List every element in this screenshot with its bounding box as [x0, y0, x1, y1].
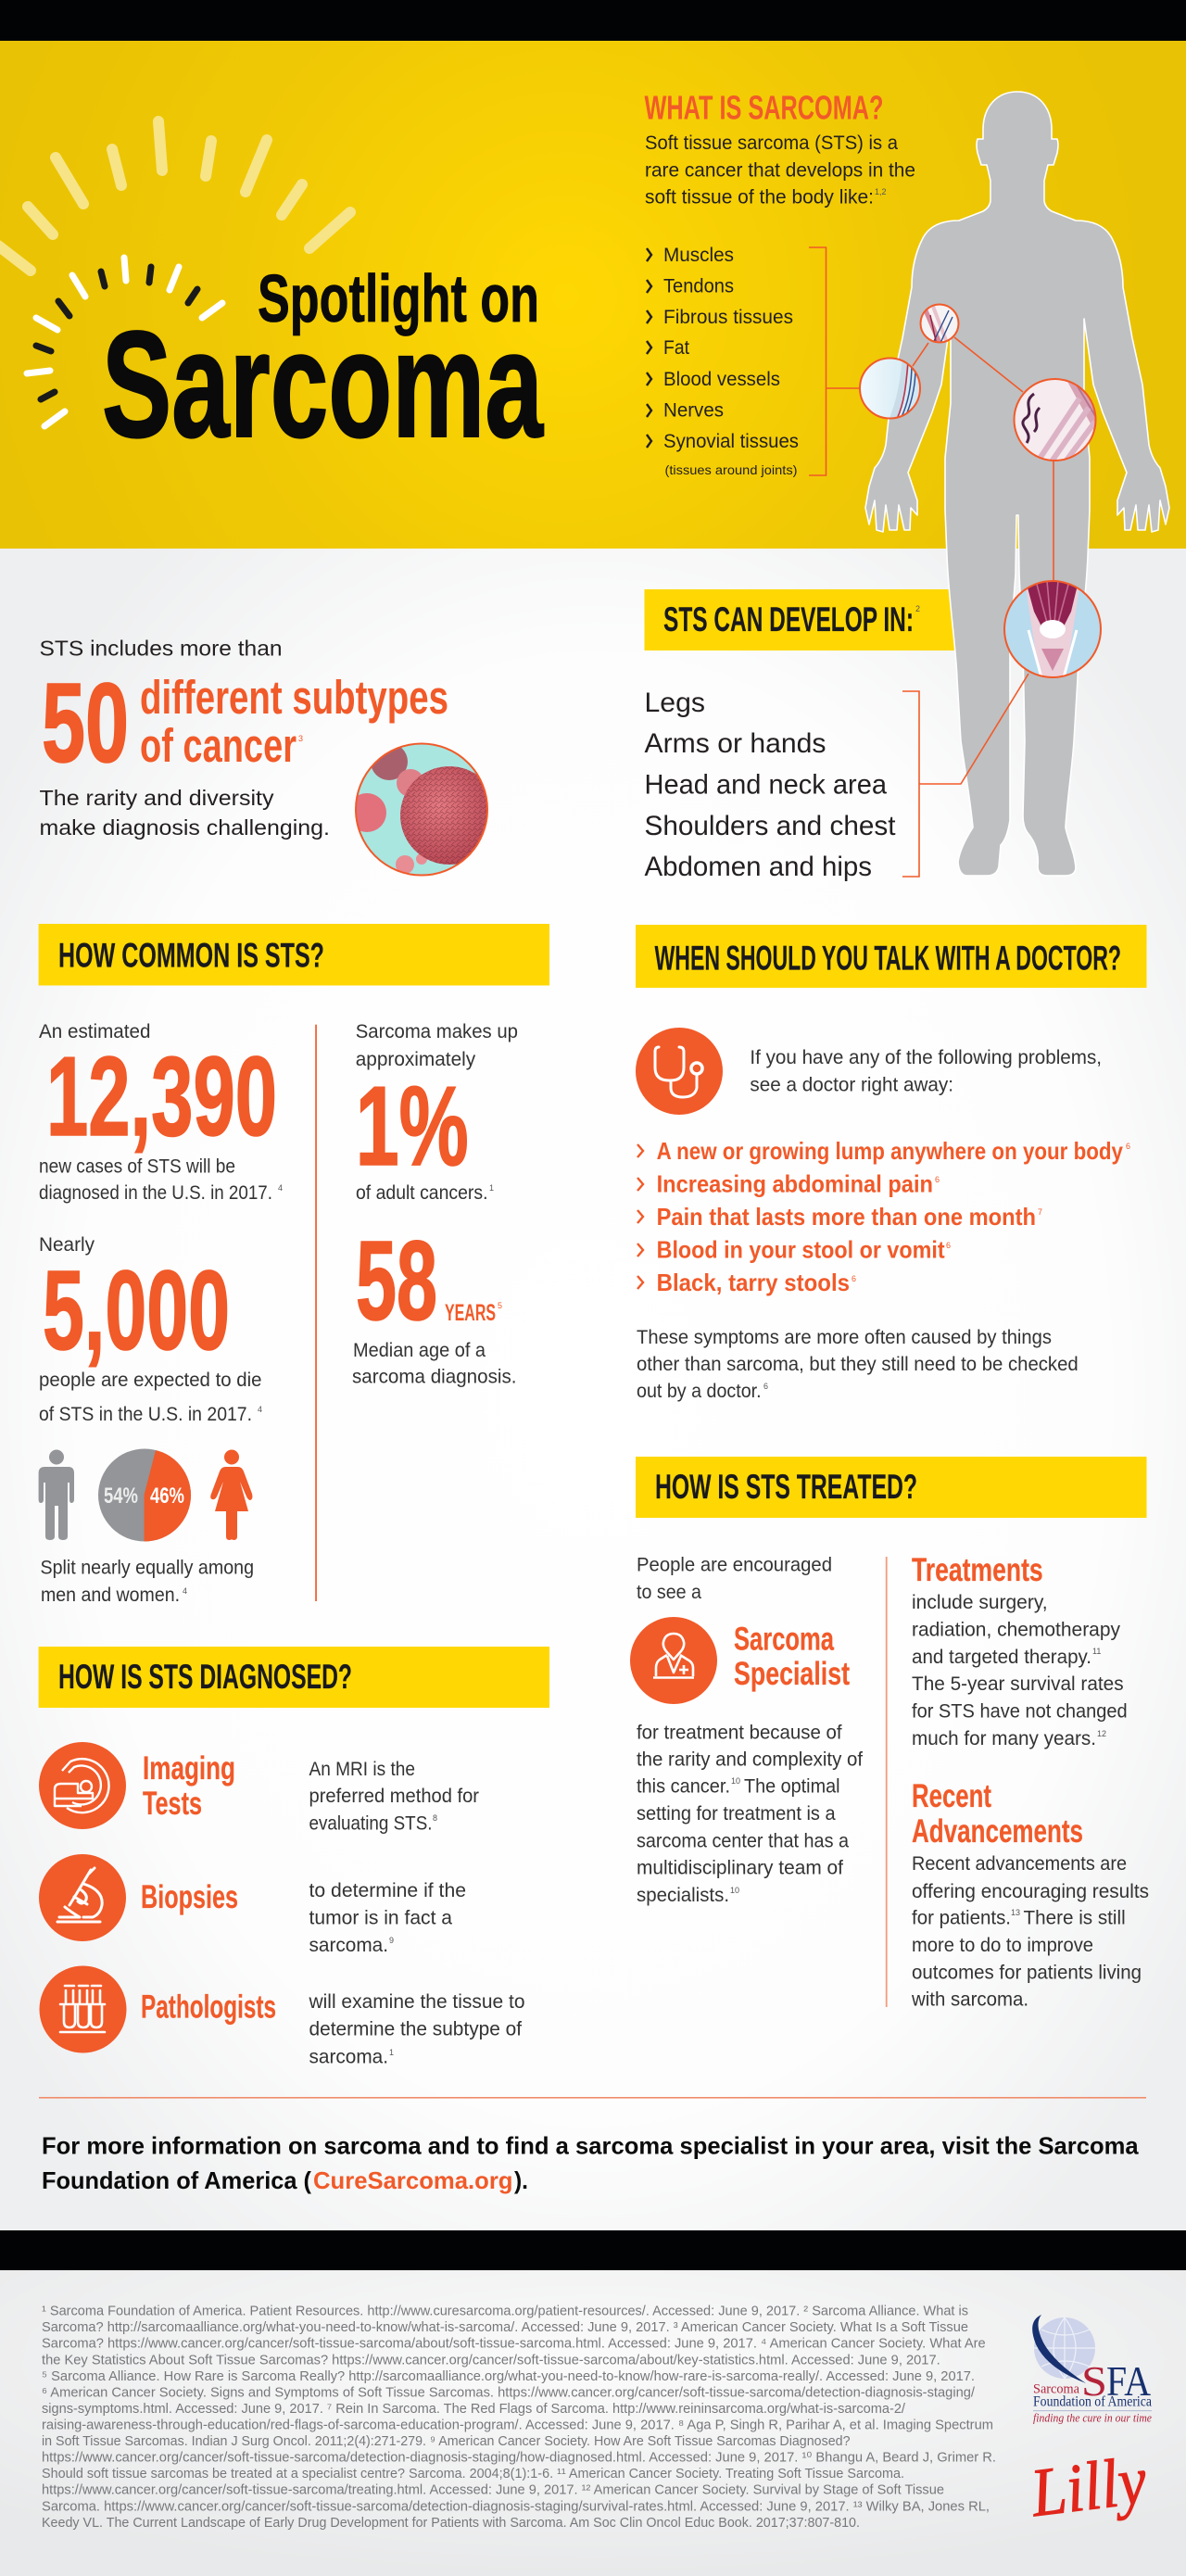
panel: STS can develop in heading bar — [645, 589, 964, 650]
divider — [39, 2097, 1146, 2099]
text: MRI description: An MRI is the — [309, 1759, 415, 1780]
footnotes: raising-awareness-through-education/red-flags-of-sarcoma-education-program/. Accessed: June 9, 2017. ⁸ Aga P, Singh R, Parihar A, et al. Imaging Spectrum — [42, 2418, 993, 2433]
text: recent advancements — [911, 1778, 1149, 2011]
body silhouette — [865, 92, 1169, 876]
stat: 5,000 deaths — [39, 1234, 262, 1425]
panel: STS can develop in heading bar: STS CAN DEVELOP IN: — [663, 600, 914, 638]
list: warning symptoms: Blood in your stool or vomit — [657, 1236, 945, 1264]
text: recent advancements: Recent — [912, 1778, 991, 1814]
list: body areas: Legs — [645, 688, 705, 718]
text: recent advancements: offering encouraging results — [912, 1881, 1149, 1902]
footnotes: https://www.cancer.org/cancer/soft-tissue-sarcoma/detection-diagnosis-staging/how-diagnosed.html. Accessed: June 9, 2017. ¹⁰ Bhangu A, Beard J, Grimer R. — [42, 2451, 996, 2466]
stat: 5,000 deaths: people are expected to die — [39, 1370, 261, 1391]
text: biopsy description: tumor is in fact a — [309, 1908, 452, 1929]
stat: 1 percent of adult cancers: approximately — [356, 1049, 476, 1070]
text: definition of soft tissue sarcoma — [645, 133, 915, 208]
list: warning symptoms: 6 — [1126, 1142, 1130, 1151]
icon: sarcoma specialist doctor — [630, 1617, 717, 1704]
text: symptoms note: other than sarcoma, but they still need to be checked — [637, 1354, 1079, 1375]
list: soft tissue types: Nerves — [663, 400, 724, 421]
text: specialist explanation: sarcoma center that has a — [637, 1831, 849, 1851]
text: pathologist description: sarcoma. — [309, 2047, 388, 2068]
text: treatments: include surgery, — [912, 1592, 1048, 1613]
title — [102, 262, 544, 469]
stat: 12,390 new cases: diagnosed in the U.S. in 2017. — [39, 1182, 272, 1204]
text: treatments: radiation, chemotherapy — [912, 1620, 1120, 1641]
list: warning symptoms: Increasing abdominal pain — [657, 1169, 933, 1197]
stat: 1 percent of adult cancers — [356, 1021, 518, 1204]
stat: median age 58 years: 5 — [498, 1301, 502, 1310]
list: body areas: Arms or hands — [645, 728, 826, 759]
stat: 1 percent of adult cancers: 1% — [356, 1063, 469, 1189]
list: soft tissue types: Tendons — [663, 276, 734, 297]
page background — [0, 549, 1186, 2230]
panel: STS can develop in heading bar: 2 — [915, 604, 920, 613]
list: soft tissue types — [647, 245, 799, 477]
label: pathologists: Pathologists — [141, 1989, 276, 2026]
text: specialist explanation — [637, 1723, 863, 1906]
footnotes: Keedy VL. The Current Landscape of Early Drug Development for Patients with Sarcoma. Am Soc Clin Oncol Educ Book. 2017;37:807-810. — [42, 2516, 860, 2531]
text: people are encouraged: People are encouraged — [637, 1555, 832, 1575]
heading: how is STS diagnosed: HOW IS STS DIAGNOSED? — [58, 1658, 352, 1696]
text: specialist explanation: multidisciplinary team of — [637, 1857, 843, 1879]
list: warning symptoms: 6 — [946, 1241, 951, 1250]
stat: median age 58 years — [352, 1218, 517, 1388]
text: treatments: 12 — [1097, 1729, 1106, 1738]
text: 50 different subtypes callout: 50 — [42, 660, 129, 786]
text: specialist explanation: setting for treatment is a — [637, 1803, 836, 1825]
heading: sarcoma specialist: Specialist — [734, 1656, 850, 1692]
list: soft tissue types: Blood vessels — [663, 369, 780, 390]
stat: 12,390 new cases: new cases of STS will be — [39, 1156, 235, 1178]
heading: sarcoma specialist: Sarcoma — [734, 1621, 834, 1657]
text: MRI description — [309, 1759, 479, 1835]
footnotes: Should soft tissue sarcomas be treated at a specialist centre? Sarcoma. 2004;8(1):1-6. ¹¹ American Cancer Society. Treating Soft Tissue Sarcoma. — [42, 2467, 904, 2481]
icon: cancer cell circle — [355, 743, 488, 877]
text: 50 different subtypes callout — [39, 637, 448, 840]
call to action: For more information on sarcoma and to find a sarcoma specialist in your area, visit the Sarcoma — [42, 2131, 1139, 2159]
icon: microscope — [39, 1854, 126, 1941]
text: split nearly equally: 4 — [183, 1586, 187, 1596]
list: warning symptoms: 6 — [852, 1274, 856, 1283]
heading: how is STS treated: HOW IS STS TREATED? — [655, 1468, 917, 1506]
heading: how common is STS: HOW COMMON IS STS? — [58, 937, 324, 975]
text: doctor intro: If you have any of the following problems, — [750, 1047, 1102, 1068]
yellow header panel — [0, 41, 1186, 549]
text: recent advancements: with sarcoma. — [911, 1989, 1028, 2011]
footnotes: signs-symptoms.html. Accessed: June 9, 2017. ⁷ Rein In Sarcoma. The Red Flags of Sarcoma. http://www.reininsarcoma.org/what-is-sarcoma-2/ — [42, 2402, 906, 2417]
heading: sarcoma specialist — [734, 1621, 850, 1692]
text: treatments: and targeted therapy. — [912, 1647, 1091, 1668]
list: soft tissue types: (tissues around joints) — [665, 462, 797, 477]
bottom black band — [0, 2230, 1186, 2270]
text: pathologist description: 1 — [389, 2048, 394, 2057]
call to action: ). — [514, 2166, 528, 2194]
icon: large muscle circle — [1014, 378, 1099, 461]
text: definition of soft tissue sarcoma: soft tissue of the body like: — [645, 187, 874, 208]
chart: sex split pie: 54% — [104, 1484, 138, 1509]
text: 50 different subtypes callout: The rarity and diversity — [39, 786, 274, 810]
footnotes: https://www.cancer.org/cancer/soft-tissue-sarcoma/treating.html. Accessed: June 9, 2017. ¹² American Cancer Society. Survival by Stage of Soft Tissue — [42, 2483, 944, 2498]
bracket connector: body areas — [902, 674, 1028, 877]
stat: median age 58 years: YEARS — [445, 1300, 496, 1326]
label: imaging tests: Imaging — [143, 1750, 235, 1787]
stat: median age 58 years: sarcoma diagnosis. — [352, 1366, 517, 1388]
text: recent advancements: 13 — [1011, 1908, 1020, 1917]
text: recent advancements: Recent advancements are — [912, 1853, 1127, 1875]
icon: medium blood vessel circle — [860, 358, 921, 419]
stat: 5,000 deaths: Nearly — [39, 1234, 95, 1256]
chart: sex split pie: 46% — [150, 1484, 184, 1509]
text: biopsy description: sarcoma. — [309, 1935, 388, 1956]
stat: 12,390 new cases: An estimated — [39, 1021, 150, 1042]
text: 50 different subtypes callout: of cancer — [140, 719, 296, 772]
text: symptoms note: 6 — [763, 1382, 768, 1391]
stat: 5,000 deaths: 5,000 — [43, 1247, 230, 1373]
footnotes: ⁶ American Cancer Society. Signs and Symptoms of Soft Tissue Sarcomas. https://www.cancer.org/cancer/soft-tissue-sarcoma/detection-diagnosis-staging/ — [42, 2385, 976, 2400]
text: people are encouraged: to see a — [637, 1582, 701, 1603]
text: pathologist description: will examine the tissue to — [309, 1991, 524, 2013]
footnotes: in Soft Tissue Sarcomas. Indian J Surg Oncol. 2011;2(4):271-279. ⁹ American Cancer Society. How Are Soft Tissue Sarcomas Diagnosed? — [42, 2434, 851, 2449]
text: people are encouraged — [637, 1555, 832, 1603]
stat: 5,000 deaths: of STS in the U.S. in 2017. — [39, 1404, 252, 1425]
text: MRI description: preferred method for — [309, 1786, 479, 1807]
text: 50 different subtypes callout: 3 — [298, 734, 303, 743]
icon: black and white sun rays — [27, 258, 222, 426]
footer background — [0, 2270, 1186, 2576]
text: definition of soft tissue sarcoma: rare cancer that develops in the — [645, 159, 915, 182]
text: recent advancements: There is still — [1023, 1908, 1126, 1929]
title: Sarcoma — [102, 299, 544, 469]
text: treatments: 11 — [1092, 1647, 1101, 1656]
icon: test tubes — [39, 1966, 126, 2053]
stat: 1 percent of adult cancers: of adult cancers. — [356, 1182, 487, 1204]
text: specialist explanation: for treatment because of — [637, 1723, 842, 1744]
text: MRI description: evaluating STS. — [309, 1813, 432, 1835]
stat: 12,390 new cases: 4 — [278, 1183, 283, 1193]
icon: pale sun rays — [0, 121, 350, 271]
top black band — [0, 0, 1186, 41]
stat: 12,390 new cases: 12,390 — [46, 1033, 277, 1159]
logo: Lilly: Lilly — [1027, 2443, 1151, 2532]
heading: what is sarcoma: WHAT IS SARCOMA? — [645, 89, 884, 126]
text: pathologist description: determine the subtype of — [309, 2019, 522, 2040]
text: specialist explanation: this cancer. — [637, 1776, 730, 1798]
list: body areas: Head and neck area — [645, 770, 887, 801]
label: imaging tests: Tests — [143, 1786, 202, 1822]
text: recent advancements: Advancements — [912, 1813, 1083, 1850]
footnotes: Sarcoma? http://sarcomaalliance.org/what-you-need-to-know/what-is-sarcoma/. Accessed: June 9, 2017. ³ American Cancer Society. What Is a Soft Tissue — [42, 2320, 968, 2335]
text: treatments: Treatments — [912, 1552, 1043, 1588]
text: recent advancements: outcomes for patients living — [912, 1963, 1142, 1983]
footnotes: Sarcoma? https://www.cancer.org/cancer/soft-tissue-sarcoma/about/soft-tissue-sarcoma.html. Accessed: June 9, 2017. ⁴ American Cancer Society. What Are — [42, 2337, 986, 2352]
text: MRI description: 8 — [433, 1813, 437, 1823]
text: pathologist description — [309, 1991, 524, 2068]
stat: median age 58 years: 58 — [356, 1218, 437, 1344]
text: split nearly equally: men and women. — [41, 1585, 180, 1606]
list: body areas: Shoulders and chest — [645, 811, 896, 841]
text: recent advancements: more to do to improve — [912, 1935, 1093, 1956]
footnotes: Sarcoma. https://www.cancer.org/cancer/soft-tissue-sarcoma/detection-diagnosis-staging/survival-rates.html. Accessed: June 9, 2017. ¹³ Wilky BA, Jones RL, — [42, 2499, 990, 2514]
text: definition of soft tissue sarcoma: 1,2 — [875, 187, 887, 196]
text: specialist explanation: 10 — [730, 1886, 739, 1895]
label: biopsies: Biopsies — [141, 1879, 238, 1915]
list: soft tissue types: Muscles — [663, 245, 734, 266]
text: specialist explanation: the rarity and complexity of — [637, 1749, 863, 1771]
footnotes: ⁵ Sarcoma Alliance. How Rare is Sarcoma Really? http://sarcomaalliance.org/what-you-need-to-know/how-rare-is-sarcoma-really/. Accessed: June 9, 2017. — [42, 2369, 975, 2384]
icon: knee circle — [1004, 581, 1101, 677]
text: 50 different subtypes callout: make diagnosis challenging. — [39, 815, 330, 840]
list: warning symptoms: Pain that lasts more than one month — [657, 1203, 1036, 1231]
list: body areas — [645, 688, 896, 882]
text: doctor intro: see a doctor right away: — [750, 1075, 953, 1095]
text: biopsy description — [309, 1880, 466, 1956]
text: specialist explanation: 10 — [731, 1776, 740, 1786]
list: warning symptoms: 6 — [935, 1175, 940, 1184]
label: imaging tests — [143, 1750, 235, 1822]
call to action: Foundation of America ( — [42, 2166, 311, 2194]
icon: stethoscope — [636, 1028, 723, 1115]
icon: small tissue circle — [920, 304, 959, 343]
bracket connector: tissue list — [809, 247, 1054, 581]
stat: 1 percent of adult cancers: 1 — [489, 1183, 494, 1193]
footnotes — [42, 2305, 996, 2531]
list: body areas: Abdomen and hips — [645, 852, 872, 882]
text: biopsy description: 9 — [389, 1936, 394, 1945]
list: warning symptoms: 7 — [1038, 1207, 1042, 1217]
text: treatments: The 5-year survival rates — [912, 1673, 1124, 1695]
text: treatments: for STS have not changed — [912, 1701, 1128, 1722]
text: symptoms note: These symptoms are more often caused by things — [637, 1327, 1052, 1348]
call to action — [42, 2131, 1139, 2194]
text: definition of soft tissue sarcoma: Soft tissue sarcoma (STS) is a — [645, 133, 898, 154]
heading: how is STS treated — [636, 1457, 1147, 1518]
call to action: CureSarcoma.org — [313, 2166, 513, 2194]
logo: Sarcoma Foundation of America: Foundation of America — [1033, 2393, 1152, 2409]
stat: 1 percent of adult cancers: Sarcoma makes up — [356, 1021, 518, 1042]
text: split nearly equally: Split nearly equally among — [41, 1557, 254, 1579]
title: Spotlight on — [258, 262, 539, 336]
footnotes: the Key Statistics About Soft Tissue Sarcomas? https://www.cancer.org/cancer/soft-tissue-sarcoma/about/key-statistics.html. Accessed: June 9, 2017. — [42, 2353, 940, 2368]
text: specialist explanation: The optimal — [744, 1776, 839, 1798]
text: biopsy description: to determine if the — [309, 1880, 466, 1901]
list: warning symptoms: A new or growing lump anywhere on your body — [657, 1137, 1123, 1165]
logo: Sarcoma Foundation of America: S — [1081, 2358, 1107, 2405]
stat: median age 58 years: Median age of a — [353, 1340, 486, 1361]
divider — [315, 1025, 317, 1601]
logo: Sarcoma Foundation of America — [1032, 2315, 1152, 2425]
heading: how is STS diagnosed — [39, 1647, 549, 1708]
icon: man — [39, 1449, 74, 1540]
footnotes: ¹ Sarcoma Foundation of America. Patient Resources. http://www.curesarcoma.org/patient-resources/. Accessed: June 9, 2017. ² Sarcoma Alliance. What is — [42, 2305, 968, 2319]
heading: how common is STS — [39, 924, 549, 986]
icon: MRI scanner — [39, 1742, 126, 1829]
list: soft tissue types: Fibrous tissues — [663, 307, 793, 328]
logo: Sarcoma Foundation of America: Sarcoma — [1033, 2382, 1079, 2397]
list: warning symptoms: Black, tarry stools — [657, 1269, 850, 1296]
divider — [886, 1557, 888, 2007]
text: treatments: much for many years. — [912, 1728, 1096, 1749]
text: symptoms note: out by a doctor. — [637, 1381, 762, 1402]
heading: when should you talk with a doctor — [636, 925, 1147, 988]
text: symptoms note — [637, 1327, 1079, 1402]
text: recent advancements: for patients. — [912, 1908, 1011, 1929]
text: split nearly equally — [41, 1557, 254, 1606]
chart: sex split pie — [98, 1449, 191, 1542]
text: 50 different subtypes callout: STS includes more than — [39, 637, 282, 661]
logo: Sarcoma Foundation of America: FA — [1106, 2358, 1151, 2405]
icon: woman — [210, 1449, 252, 1540]
list: soft tissue types: Synovial tissues — [663, 431, 799, 452]
text: treatments — [912, 1552, 1128, 1749]
list: soft tissue types: Fat — [663, 337, 689, 359]
text: 50 different subtypes callout: different subtypes — [140, 671, 448, 724]
logo: Sarcoma Foundation of America: finding the cure in our time — [1033, 2411, 1152, 2425]
list: warning symptoms — [637, 1137, 1130, 1296]
stat: 12,390 new cases — [39, 1021, 283, 1204]
stat: 5,000 deaths: 4 — [258, 1405, 262, 1414]
text: doctor intro — [750, 1047, 1102, 1095]
text: specialist explanation: specialists. — [637, 1885, 729, 1906]
